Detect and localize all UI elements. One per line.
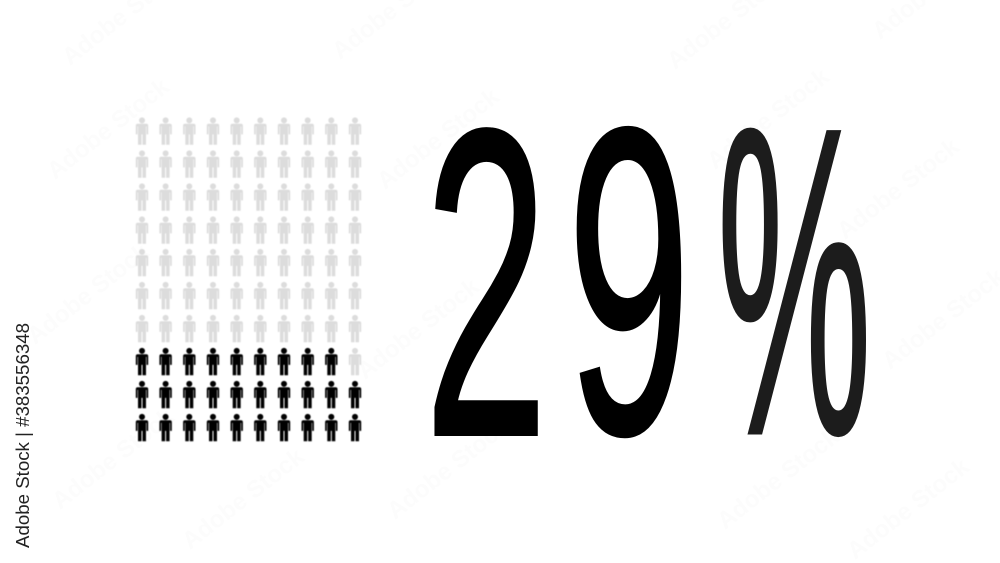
black people: filled rows [136, 348, 361, 441]
watermark: Adobe Stock [832, 133, 965, 245]
watermark: Adobe Stock [177, 443, 310, 555]
stock id credit: Adobe Stock | #383556348 [12, 323, 33, 548]
watermark: Adobe Stock [42, 73, 175, 185]
watermark: Adobe Stock [712, 423, 845, 535]
watermark: Adobe Stock [352, 273, 485, 385]
watermark: Adobe Stock [382, 413, 515, 525]
watermark: Adobe Stock [22, 238, 155, 350]
watermark: Adobe Stock [47, 403, 180, 515]
percent sign: % [717, 36, 872, 526]
people pictogram grid: 29 of 100 filled [136, 117, 361, 441]
watermark: Adobe Stock [842, 453, 975, 563]
grey people: unfilled rows [136, 117, 361, 375]
watermark: Adobe Stock [702, 63, 835, 175]
watermark: Adobe Stock [372, 83, 505, 195]
digit 9: 9 [567, 37, 691, 526]
digit 2: 2 [424, 38, 548, 528]
